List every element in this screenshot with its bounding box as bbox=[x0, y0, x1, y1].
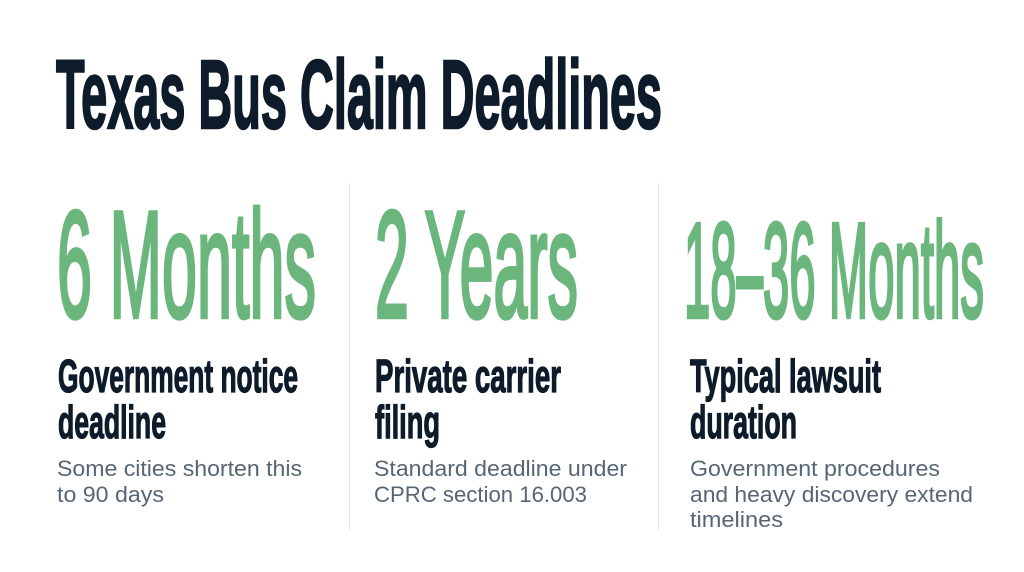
description: lawsuit duration: Government procedures bbox=[690, 456, 940, 481]
description: private carrier: Standard deadline under bbox=[374, 456, 628, 481]
heading: typical lawsuit duration bbox=[690, 350, 881, 448]
heading: private carrier filing bbox=[375, 350, 561, 448]
divider: left bbox=[348, 183, 350, 530]
divider: right bbox=[658, 183, 660, 530]
heading: government notice deadline: deadline bbox=[58, 396, 166, 448]
description: government notice: Some cities shorten this bbox=[57, 456, 302, 481]
heading: private carrier filing: Private carrier bbox=[375, 350, 561, 402]
panel: government notice bbox=[57, 180, 316, 507]
heading: typical lawsuit duration: duration bbox=[690, 396, 797, 448]
description: government notice: to 90 days bbox=[57, 482, 164, 507]
heading: government notice deadline: Government notice bbox=[58, 350, 298, 402]
heading: private carrier filing: filing bbox=[375, 396, 440, 448]
panel: private carrier bbox=[374, 180, 628, 507]
description: lawsuit duration: timelines bbox=[690, 507, 783, 532]
heading: typical lawsuit duration: Typical lawsuit bbox=[690, 350, 881, 402]
description: government notice bbox=[57, 456, 302, 507]
description: private carrier bbox=[374, 456, 628, 507]
description: private carrier: CPRC section 16.003 bbox=[374, 482, 587, 507]
text: 6 Months bbox=[57, 180, 316, 350]
heading: government notice deadline bbox=[58, 350, 298, 448]
description: lawsuit duration bbox=[690, 456, 973, 532]
panel: lawsuit duration bbox=[684, 195, 984, 532]
text: 2 Years bbox=[375, 180, 578, 350]
description: lawsuit duration: and heavy discovery extend bbox=[690, 482, 973, 507]
